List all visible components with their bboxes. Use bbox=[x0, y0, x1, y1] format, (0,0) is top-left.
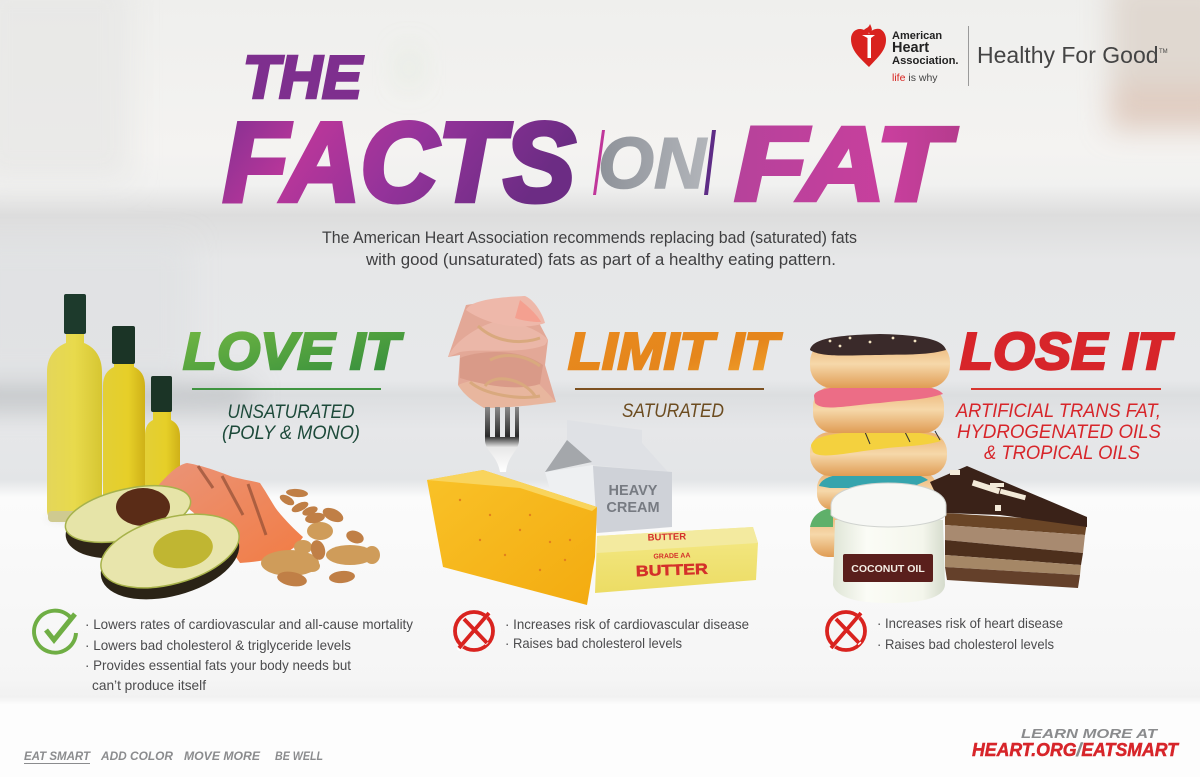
food: avocado halves bbox=[60, 475, 248, 613]
intro text bbox=[322, 228, 857, 269]
panel: lose it bbox=[810, 323, 1175, 652]
subheading: fat types: HYDROGENATED OILS bbox=[957, 422, 1161, 443]
heading: limit it: LIMIT IT bbox=[568, 323, 782, 381]
footer nav: BE WELL bbox=[275, 749, 323, 763]
logo: American Heart Association, Healthy For Good: life is why bbox=[892, 72, 938, 84]
food: heavy cream carton: HEAVY bbox=[609, 483, 658, 499]
heading: love it: LOVE IT bbox=[183, 323, 404, 381]
footer nav: EAT SMART bbox=[24, 749, 92, 763]
food: chocolate cake slice bbox=[930, 466, 1087, 588]
logo: American Heart Association, Healthy For Good: Association. bbox=[892, 55, 959, 67]
risks list bbox=[877, 616, 1063, 652]
benefits list: · Lowers rates of cardiovascular and all-cause mortality bbox=[85, 617, 413, 632]
intro text: with good (unsaturated) fats as part of a healthy eating pattern. bbox=[365, 250, 836, 269]
benefits list: · Provides essential fats your body needs but bbox=[85, 658, 351, 673]
footer call to action: LEARN MORE AT bbox=[1021, 727, 1159, 741]
title word: FAT: FAT bbox=[735, 106, 957, 222]
risks list: · Increases risk of heart disease bbox=[877, 616, 1063, 631]
title word: ON with slashes: ON bbox=[598, 124, 708, 204]
benefits list bbox=[85, 617, 413, 693]
risks list: · Raises bad cholesterol levels bbox=[877, 637, 1054, 652]
food: heavy cream carton: CREAM bbox=[606, 500, 660, 516]
subheading: unsaturated: (POLY & MONO) bbox=[222, 423, 360, 444]
food: heavy cream carton bbox=[545, 420, 672, 533]
benefits list: can’t produce itself bbox=[92, 678, 206, 693]
footer nav: MOVE MORE bbox=[184, 749, 261, 763]
food: olive oil bottles bbox=[45, 294, 180, 522]
subheading: fat types: & TROPICAL OILS bbox=[984, 443, 1140, 464]
icon: green check bbox=[34, 611, 76, 653]
risks list: · Raises bad cholesterol levels bbox=[505, 636, 682, 651]
icon: red cross bbox=[455, 612, 493, 650]
food: coconut oil jar: COCONUT OIL bbox=[851, 563, 925, 575]
subheading: saturated: SATURATED bbox=[622, 401, 724, 422]
logo: American Heart Association, Healthy For Good: Heart bbox=[892, 40, 929, 56]
food: salmon bbox=[157, 463, 303, 563]
subheading: fat types: ARTIFICIAL TRANS FAT, bbox=[955, 401, 1161, 422]
title: The Facts on Fat bbox=[223, 44, 957, 225]
title word: THE: THE bbox=[243, 44, 364, 111]
subheading: unsaturated bbox=[222, 402, 360, 444]
footer nav bbox=[24, 749, 323, 764]
logo: American Heart Association, Healthy For Good bbox=[851, 24, 1168, 86]
footer call to action: HEART.ORG/EATSMART bbox=[972, 740, 1180, 760]
risks list bbox=[505, 617, 749, 651]
icon: heart and torch bbox=[851, 24, 886, 67]
logo: American Heart Association, Healthy For Good: Healthy For Good bbox=[977, 42, 1159, 68]
risks list: · Increases risk of cardiovascular disease bbox=[505, 617, 749, 632]
food: coconut oil jar bbox=[831, 483, 946, 603]
subheading: unsaturated: UNSATURATED bbox=[228, 402, 355, 423]
heading: lose it: LOSE IT bbox=[960, 323, 1175, 381]
footer nav: ADD COLOR bbox=[100, 749, 173, 763]
panel: love it bbox=[34, 294, 413, 693]
title word: FACTS: FACTS bbox=[223, 101, 575, 225]
food: bacon on fork bbox=[448, 296, 556, 472]
food: cheese wedge bbox=[427, 470, 597, 605]
logo: American Heart Association, Healthy For Good: American bbox=[892, 30, 942, 42]
food: butter bbox=[595, 527, 758, 593]
footer call to action bbox=[972, 727, 1180, 760]
food: butter: GRADE AA bbox=[653, 552, 691, 561]
food: nuts bbox=[261, 488, 380, 588]
food: butter: BUTTER bbox=[636, 561, 708, 580]
food: stacked donuts bbox=[810, 334, 950, 557]
benefits list: · Lowers bad cholesterol & triglyceride levels bbox=[85, 638, 351, 653]
icon: red cross bbox=[827, 612, 865, 650]
food: butter: BUTTER bbox=[647, 531, 686, 544]
subheading: fat types bbox=[955, 401, 1161, 464]
logo: American Heart Association, Healthy For Good: TM bbox=[1159, 49, 1168, 55]
panel: limit it bbox=[427, 296, 782, 651]
intro text: The American Heart Association recommends replacing bad (saturated) fats bbox=[322, 228, 857, 247]
fork bbox=[485, 407, 519, 472]
